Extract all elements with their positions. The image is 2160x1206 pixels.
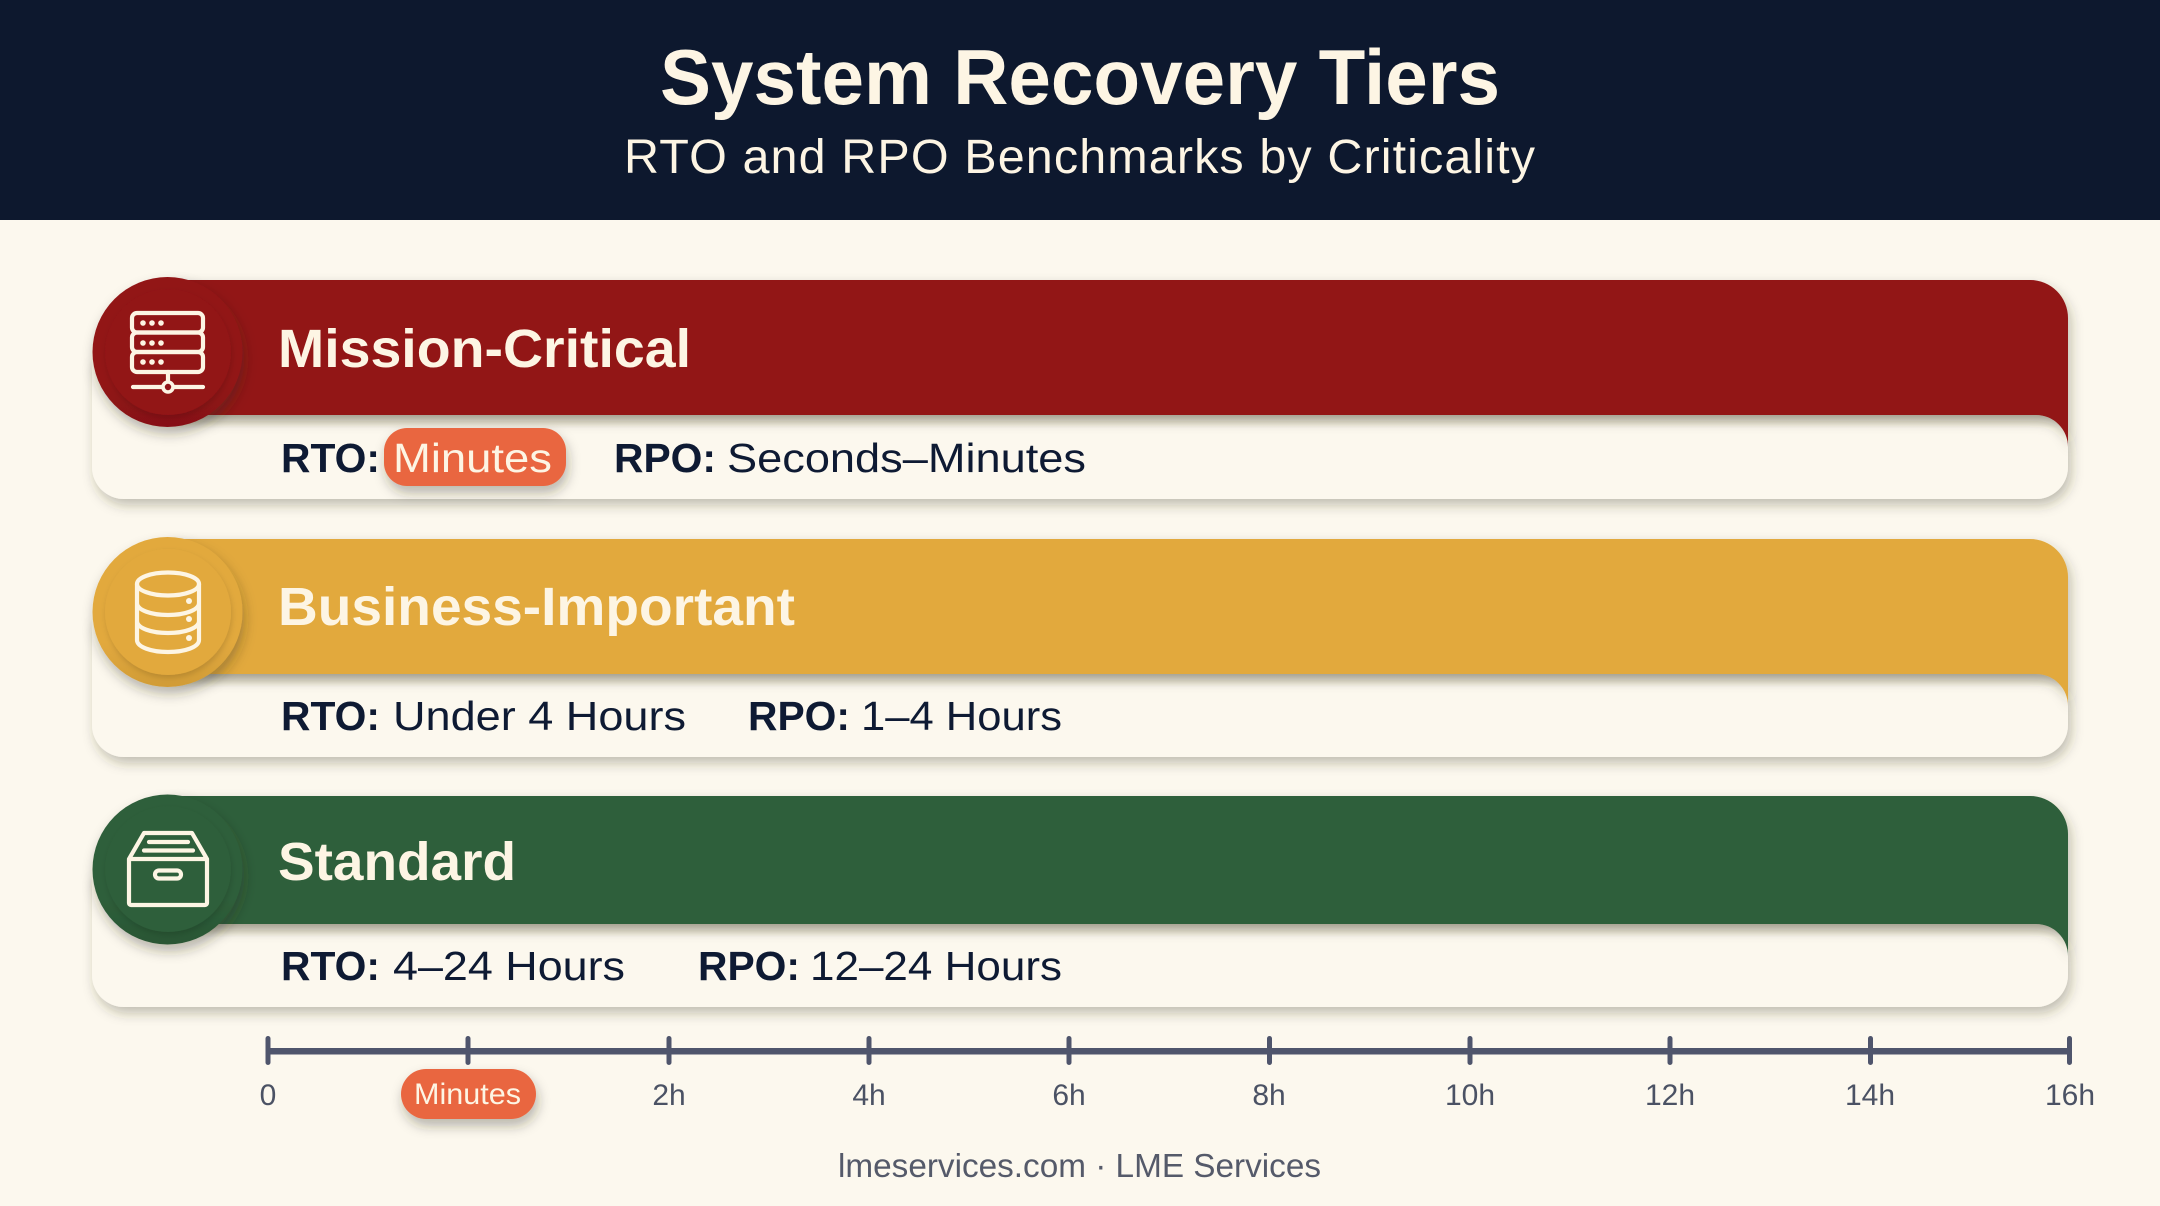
RPO label: RPO: <box>698 943 800 989</box>
RPO label: RPO: <box>614 435 716 481</box>
axis labels: 6h <box>1052 1079 1086 1112</box>
RPO value: 1–4 Hours <box>861 693 1062 739</box>
details panel <box>92 360 2068 499</box>
axis labels: 10h <box>1445 1079 1495 1112</box>
RTO highlight pill: Minutes <box>393 435 552 481</box>
panel: Standard tier <box>92 794 2068 1007</box>
axis labels: 4h <box>852 1079 886 1112</box>
RPO label: RPO: <box>748 693 850 739</box>
icon: database badge <box>92 537 242 687</box>
RTO label: RTO: <box>281 693 380 739</box>
timeline axis <box>260 1036 2095 1119</box>
RTO value: Under 4 Hours <box>393 693 686 739</box>
tier name: Standard <box>278 832 516 892</box>
RPO value: Seconds–Minutes <box>727 435 1086 481</box>
RPO value: 12–24 Hours <box>810 943 1062 989</box>
details panel <box>92 875 2068 1007</box>
panel: Mission-Critical tier <box>92 277 2068 499</box>
Minutes marker pill: Minutes <box>414 1078 521 1111</box>
panel top shading <box>170 924 2068 1007</box>
RTO label: RTO: <box>281 943 380 989</box>
axis labels <box>260 1079 2095 1112</box>
axis labels: 14h <box>1845 1079 1895 1112</box>
axis labels: 8h <box>1252 1079 1286 1112</box>
tier band <box>168 280 2068 447</box>
icon: server badge <box>92 277 242 427</box>
tier band <box>168 539 2068 706</box>
RTO highlight pill <box>384 428 566 486</box>
icon: archive box badge <box>92 794 242 944</box>
RTO value: 4–24 Hours <box>393 943 625 989</box>
axis labels: 0 <box>260 1079 276 1112</box>
panel top shading <box>170 674 2068 757</box>
axis labels: 2h <box>652 1079 686 1112</box>
axis labels: 16h <box>2045 1079 2095 1112</box>
footer source line: lmeservices.com · LME Services <box>838 1147 1321 1184</box>
tier name: Business-Important <box>278 577 795 637</box>
details panel <box>92 620 2068 757</box>
panel top shading <box>170 415 2068 499</box>
header banner <box>0 0 2160 220</box>
tier name: Mission-Critical <box>278 319 691 379</box>
title: System Recovery Tiers <box>660 33 1500 121</box>
axis labels: 12h <box>1645 1079 1695 1112</box>
subtitle: RTO and RPO Benchmarks by Criticality <box>624 130 1536 184</box>
tier band <box>168 796 2068 956</box>
RTO label: RTO: <box>281 435 380 481</box>
panel: Business-Important tier <box>92 537 2068 757</box>
Minutes marker pill <box>401 1069 536 1119</box>
